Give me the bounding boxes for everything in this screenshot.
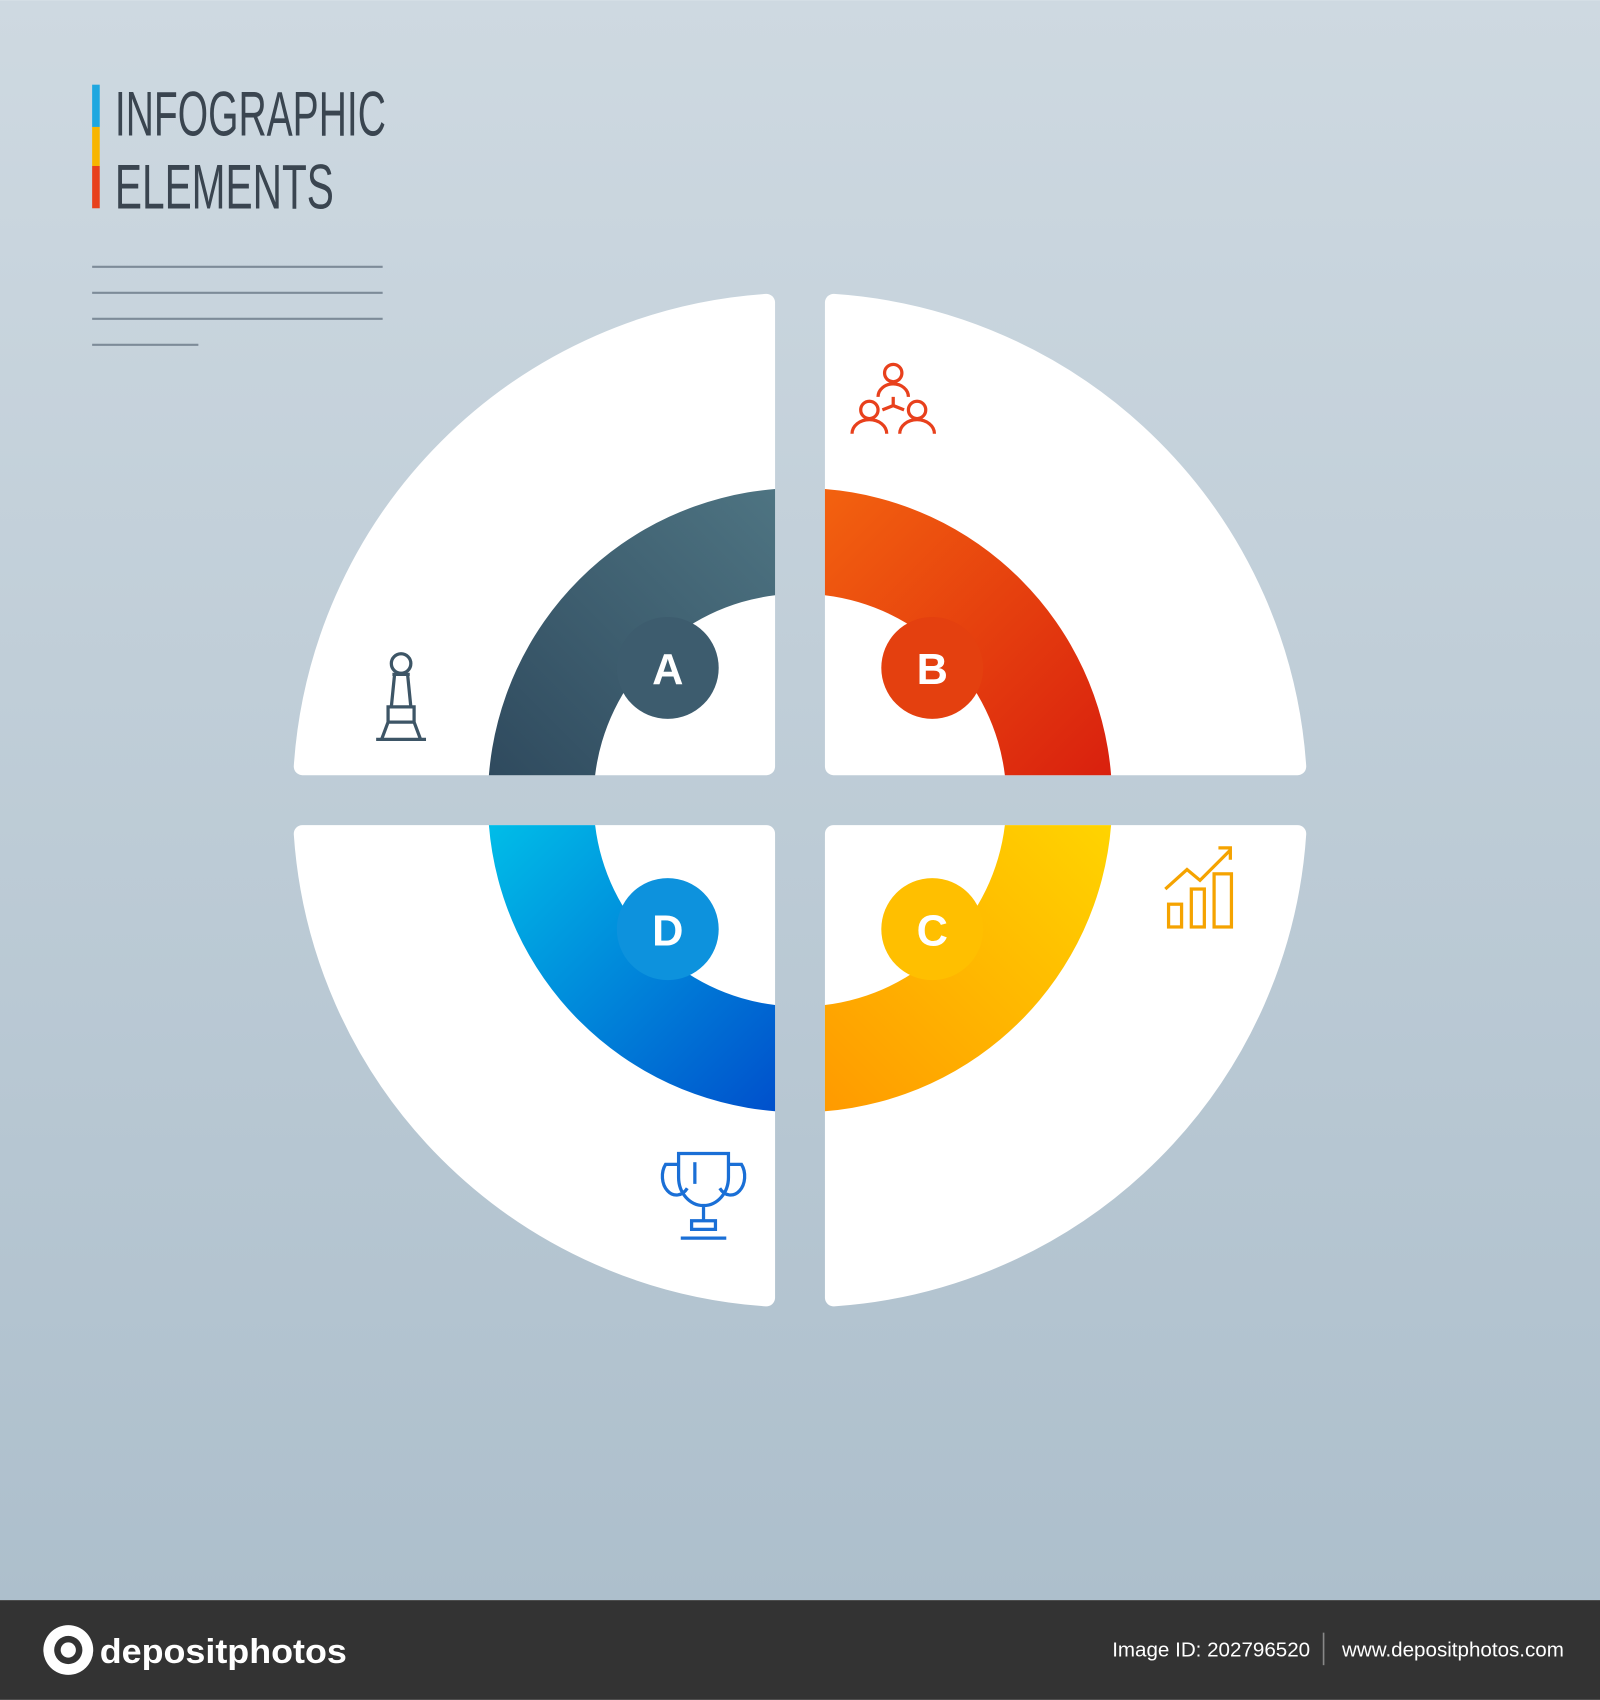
panel: segment B: B <box>917 646 948 694</box>
panel: segment D <box>302 825 775 1298</box>
title <box>92 80 386 222</box>
icon: growth chart <box>1165 848 1231 927</box>
panel: segment C <box>825 825 1298 1298</box>
footer bar <box>0 1600 1600 1700</box>
icon: chess pawn <box>376 654 426 739</box>
title: ELEMENTS <box>115 152 334 222</box>
panel: segment A <box>302 303 775 775</box>
panel: segment C: C <box>917 907 948 955</box>
icon: team <box>852 364 934 434</box>
title: INFOGRAPHIC <box>115 80 386 150</box>
panel: segment B <box>825 303 1298 775</box>
footer bar: depositphotos <box>100 1633 347 1671</box>
footer bar: www.depositphotos.com <box>1341 1639 1564 1662</box>
panel: segment D: D <box>652 907 683 955</box>
text placeholder lines <box>92 267 383 345</box>
icon: trophy <box>662 1154 745 1238</box>
footer bar: Image ID: 202796520 <box>1112 1639 1310 1662</box>
panel: segment A: A <box>652 646 683 694</box>
